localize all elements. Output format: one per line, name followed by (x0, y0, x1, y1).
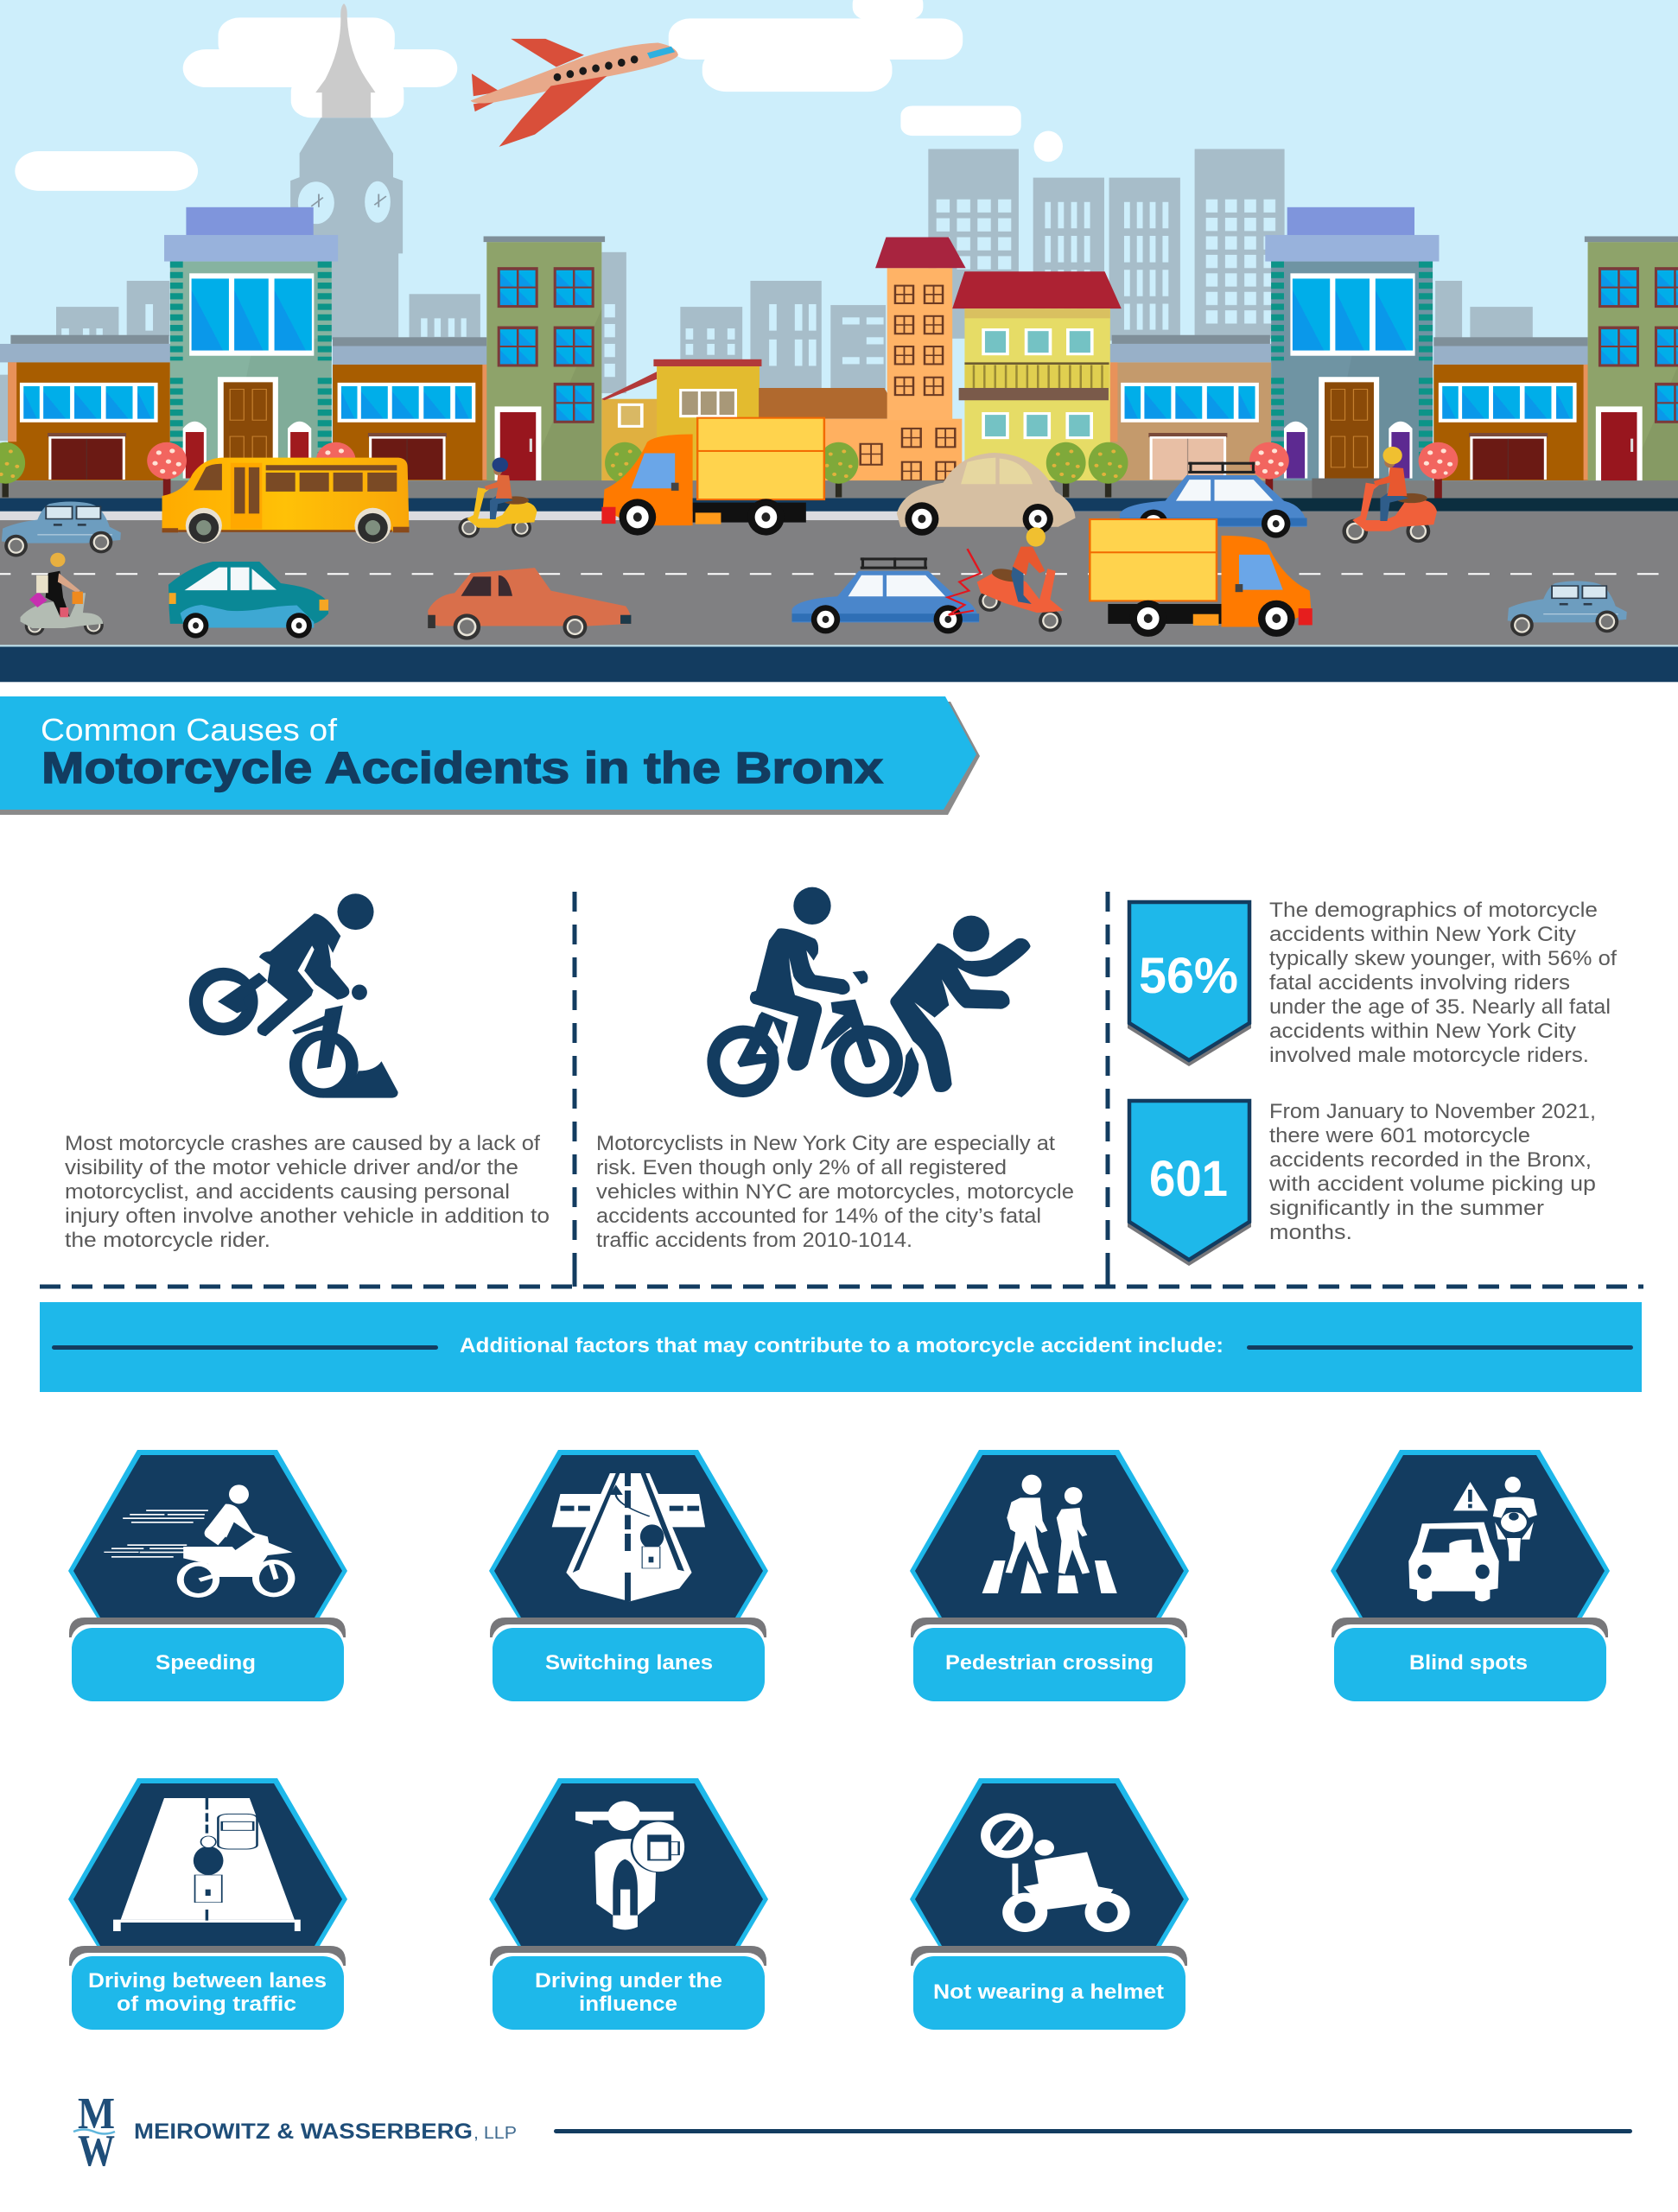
factor: pedestrian crossing (910, 1450, 1189, 1701)
stat badge: 601: 601 (1149, 1151, 1228, 1207)
text: visibility paragraph: Most motorcycle crashes are caused by a lack of (65, 1132, 540, 1155)
label: blind spots: Blind spots (1409, 1651, 1528, 1675)
text: demographics paragraph: The demographics of motorcycle (1269, 899, 1598, 922)
title banner (0, 696, 980, 815)
label: speeding: Speeding (156, 1651, 256, 1675)
lady on scooter with shopping bags (21, 553, 104, 636)
text: visibility paragraph: motorcyclist, and accidents causing personal (65, 1180, 510, 1204)
factor: driving between lanes (68, 1778, 347, 2030)
text: visibility paragraph: the motorcycle rider. (65, 1229, 270, 1252)
blue roof-rack car, crash (791, 557, 979, 633)
icon: car with motorcycle in blind spot (1408, 1477, 1537, 1601)
text: January to November paragraph (1268, 1100, 1596, 1244)
sidewalk and road (0, 479, 1678, 682)
street trees (0, 442, 1458, 499)
text: New York City risk paragraph: vehicles within NYC are motorcycles, motorcycle (596, 1180, 1074, 1204)
text: demographics paragraph: typically skew younger, with 56% of (1269, 947, 1617, 970)
title main line: Motorcycle Accidents in the Bronx (41, 743, 883, 792)
orange scooter rider, upper lane (1342, 447, 1437, 543)
yellow scooter rider (459, 457, 537, 538)
text: New York City risk paragraph: accidents accounted for 14% of the city’s fatal (596, 1205, 1041, 1228)
text: demographics paragraph: involved male motorcycle riders. (1269, 1044, 1589, 1067)
logo monogram (73, 2089, 115, 2176)
label: driving between lanes: Driving between lanes (88, 1969, 327, 1993)
text: New York City risk paragraph: traffic accidents from 2010-1014. (596, 1229, 912, 1252)
label: pedestrian crossing: Pedestrian crossing (945, 1651, 1154, 1675)
text: visibility paragraph: visibility of the motor vehicle driver and/or the (65, 1156, 518, 1179)
right street block of buildings (1098, 207, 1678, 482)
blue roof-rack car, upper lane (1120, 462, 1307, 538)
text: demographics paragraph: accidents within New York City (1269, 923, 1577, 946)
text: demographics paragraph: fatal accidents involving riders (1269, 971, 1570, 995)
text: demographics paragraph (1269, 899, 1617, 1067)
beige beetle (897, 453, 1076, 536)
text: January to November paragraph: with accident volume picking up (1268, 1173, 1596, 1196)
stat badge: 601 (1128, 1101, 1251, 1266)
orange delivery truck, road (1090, 519, 1313, 637)
school bus (162, 458, 410, 543)
hero city illustration (0, 0, 1678, 682)
icon: pedestrians on crosswalk (982, 1475, 1117, 1593)
clock tower (290, 3, 403, 340)
text: New York City risk paragraph: Motorcyclists in New York City are especially at (596, 1132, 1055, 1155)
icon: riding between lanes (113, 1798, 301, 1931)
additional factors banner: Additional factors that may contribute to a motorcycle accident include: (460, 1334, 1224, 1357)
text: New York City risk paragraph: risk. Even though only 2% of all registered (596, 1156, 1007, 1179)
label: not wearing a helmet: Not wearing a helmet (933, 1980, 1164, 2004)
icon: rider with crossed-out helmet (981, 1813, 1130, 1932)
airplane (471, 39, 678, 147)
background skyline (0, 149, 1533, 441)
logo monogram: W (78, 2126, 115, 2176)
text: demographics paragraph: accidents within New York City (1269, 1020, 1577, 1043)
stat badge: 56%: 56% (1139, 948, 1238, 1004)
small blue car, far right (1508, 581, 1627, 636)
icon: rider with beer (575, 1801, 685, 1929)
clouds (15, 0, 1063, 191)
text: January to November paragraph: From January to November 2021, (1269, 1100, 1596, 1123)
factor: not wearing a helmet (910, 1778, 1189, 2030)
orange delivery truck, kerb side (601, 418, 824, 536)
title small line: Common Causes of (41, 712, 338, 747)
central colourful houses (601, 237, 1122, 499)
footer logo (73, 2089, 517, 2176)
second-row vehicles on the right half (791, 447, 1627, 637)
text: visibility paragraph: injury often involve another vehicle in addition to (65, 1205, 550, 1228)
text: visibility paragraph (65, 1132, 550, 1252)
text: demographics paragraph: under the age of 35. Nearly all fatal (1269, 995, 1611, 1019)
crashing scooter rider (948, 527, 1064, 632)
label: switching lanes: Switching lanes (545, 1651, 713, 1675)
icon: switching lanes road (552, 1473, 705, 1601)
left street block of buildings (0, 207, 605, 482)
text: January to November paragraph: months. (1269, 1221, 1352, 1244)
additional factors banner (40, 1302, 1642, 1392)
factor: driving under the influence: influence (579, 1993, 677, 2016)
factor: switching lanes (489, 1450, 768, 1701)
stat badge: 56% (1128, 902, 1251, 1066)
blue compact car, kerb (2, 502, 121, 556)
text: New York City risk paragraph (596, 1132, 1074, 1252)
factor: driving under the influence (489, 1778, 768, 2030)
firm name: MEIROWITZ & WASSERBERG (134, 2120, 473, 2144)
text: January to November paragraph: accidents recorded in the Bronx, (1269, 1148, 1592, 1172)
icon: motorcycle hitting pedestrian (707, 887, 1031, 1097)
section dividers (40, 892, 1643, 1287)
logo monogram: M (78, 2089, 115, 2139)
text: January to November paragraph: there were 601 motorcycle (1269, 1124, 1530, 1147)
factor: speeding (68, 1450, 347, 1701)
label: driving under the influence: Driving under the (535, 1969, 722, 1993)
orange sedan (428, 568, 632, 640)
teal car (168, 562, 328, 639)
firm suffix: , LLP (474, 2124, 517, 2143)
factor: blind spots (1331, 1450, 1610, 1701)
factor: driving between lanes: of moving traffic (117, 1993, 296, 2016)
icon: speeding motorcycle (104, 1484, 295, 1598)
icon: motorcycle wheelie crash (189, 893, 398, 1098)
text: January to November paragraph: significantly in the summer (1269, 1197, 1544, 1220)
